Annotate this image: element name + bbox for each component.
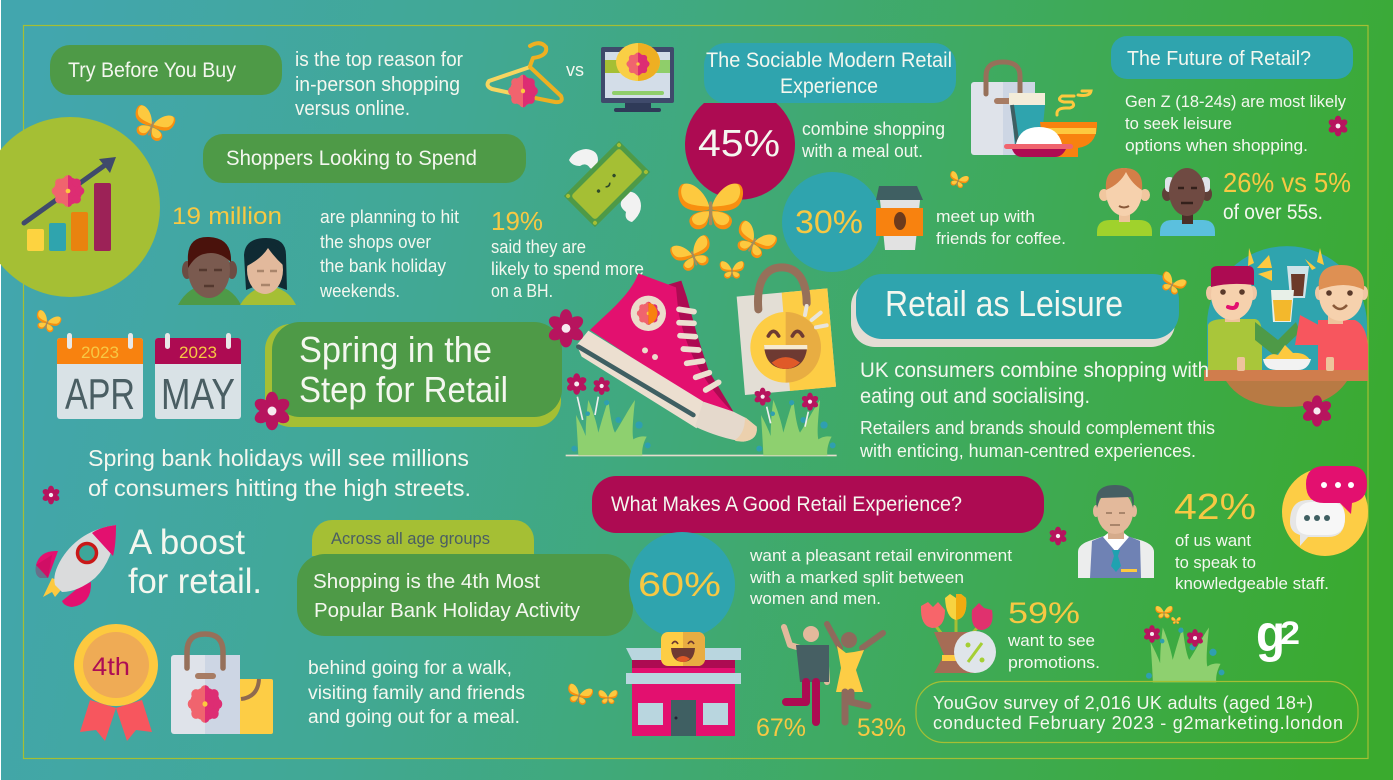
- stat: 53%: 53%: [857, 714, 906, 742]
- text: pleasant retail environment: with a marked split between: [749, 568, 964, 587]
- text: likely to spend more: [491, 237, 644, 301]
- flower: [41, 486, 61, 504]
- text: knowledgeable staff: to speak to: [1175, 553, 1256, 572]
- calendar: April: [57, 333, 143, 419]
- icon: rocket: [36, 525, 116, 607]
- left edge: [0, 0, 1, 780]
- text: combine shopping: with a meal out.: [801, 141, 923, 161]
- text: planning to hit the shops: [319, 207, 459, 301]
- heading: The Sociable Modern Retail Experience: [704, 43, 956, 103]
- calendar: April: APR: [65, 370, 135, 419]
- icon: tulips with discount tag: [921, 594, 996, 673]
- stat: 59%: 59%: [1008, 597, 1080, 630]
- source box: [916, 682, 1358, 742]
- text: spring bank holidays: of consumers hitting the high streets.: [88, 475, 471, 501]
- text: Gen Z: [1125, 92, 1346, 155]
- icon: young and older person: [1097, 168, 1215, 236]
- text: combine shopping: [801, 119, 945, 161]
- text: knowledgeable staff: [1175, 531, 1329, 593]
- text: pleasant retail environment: women and men.: [749, 589, 881, 608]
- heading: Shoppers Looking to Spend: [203, 134, 526, 183]
- stat: 19%: 19%: [491, 206, 543, 236]
- panel: 4th most popular activity: [297, 554, 633, 636]
- icon: 4th place medal: 4th: [92, 653, 130, 681]
- heading: Retail as Leisure: [851, 274, 1179, 347]
- text: planning to hit the shops: the shops over: [320, 232, 431, 252]
- icon: 4th place medal: [74, 624, 158, 741]
- text: A boost for retail: for retail.: [128, 562, 262, 601]
- heading: What Makes A Good Retail Experience?: [592, 476, 1044, 533]
- icon: chat bubbles: [1282, 466, 1368, 556]
- heading: The Sociable Modern Retail Experience: Experience: [780, 74, 878, 98]
- heading: The Future of Retail?: The Future of Retail?: [1127, 48, 1311, 70]
- text: want to see promotions: [1007, 631, 1100, 672]
- text: of over 55s: of over 55s.: [1223, 201, 1323, 224]
- icon: grass, flowers and butterflies: [1143, 606, 1225, 682]
- text: spring bank holidays: Spring bank holidays will see millions: [88, 445, 469, 471]
- panel: growth chart circle: [0, 117, 160, 297]
- text: UK consumers: [860, 359, 1209, 408]
- stat circle: 60%: 60%: [638, 566, 721, 604]
- text: want to see promotions: want to see: [1007, 631, 1095, 650]
- source box: YouGov survey of 2,016 UK adults (aged 18+): [933, 693, 1313, 713]
- calendar: May: 2023: [179, 343, 217, 362]
- flowers: [546, 309, 819, 427]
- stat circle: 30%: 30%: [795, 204, 863, 240]
- tab: Across all age groups: Across all age groups: [331, 529, 490, 548]
- text: planning to hit the shops: are planning to hit: [320, 207, 459, 227]
- icon: staff member: [1078, 485, 1154, 578]
- icon: flying banknote: [564, 141, 650, 227]
- stat: 42%: 42%: [1174, 486, 1256, 527]
- stat circle: 45%: 45%: [698, 123, 780, 165]
- text: want to see promotions: promotions.: [1008, 653, 1100, 672]
- text: behind going for a walk: behind going for a walk,: [308, 658, 512, 679]
- icon: friends toasting at a table: [1204, 246, 1368, 407]
- icon: two shoppers: [178, 237, 296, 305]
- label: vs: vs: [566, 60, 584, 80]
- butterfly: [947, 170, 970, 190]
- text: behind going for a walk: and going out for a meal.: [308, 707, 520, 728]
- heading: Try Before You Buy: [50, 45, 282, 95]
- icon: bag, drink and food: [971, 62, 1097, 157]
- text: meet up with friends: [936, 207, 1066, 248]
- heading: Try Before You Buy: Try Before You Buy: [68, 59, 236, 82]
- text: Gen Z: to seek leisure: [1125, 114, 1232, 133]
- text: A boost for retail: A boost: [129, 523, 245, 562]
- heading: What Makes A Good Retail Experience?: What Makes A Good Retail Experience?: [611, 493, 962, 516]
- flower: [252, 392, 292, 430]
- text: knowledgeable staff: knowledgeable staff.: [1175, 574, 1329, 593]
- icon: shopping bags: [171, 634, 273, 734]
- icon: clothes hanger: [488, 43, 562, 107]
- text: top reason: in-person shopping: [295, 74, 460, 96]
- butterflies: [565, 683, 618, 707]
- flower: [1327, 116, 1349, 136]
- text: spring bank holidays: [88, 445, 471, 501]
- stat circle: 30%: [782, 172, 882, 272]
- stat: 19 million: 19 million: [172, 203, 282, 230]
- text: top reason: [295, 49, 463, 120]
- stat: 26% vs 5%: 26% vs 5%: [1223, 167, 1351, 198]
- butterfly: [32, 309, 62, 335]
- text: retailers and brands: Retailers and brands should complement this: [860, 418, 1215, 438]
- text: likely to spend more: on a BH.: [491, 281, 553, 301]
- heading: The Future of Retail?: [1111, 36, 1353, 79]
- text: meet up with friends: friends for coffee.: [936, 229, 1066, 248]
- text: top reason: is the top reason for: [295, 49, 463, 71]
- calendar: May: [155, 333, 241, 419]
- grass right: [756, 400, 836, 455]
- calendar: May: MAY: [161, 370, 235, 419]
- heading: Shoppers Looking to Spend: Shoppers Looking to Spend: [226, 147, 477, 170]
- text: meet up with friends: meet up with: [936, 207, 1035, 226]
- heading: Retail as Leisure: Retail as Leisure: [885, 283, 1123, 324]
- calendar: April: 2023: [81, 343, 119, 362]
- text: UK consumers: eating out and socialising.: [860, 385, 1090, 408]
- logo: g2: g: [1256, 605, 1285, 663]
- text: UK consumers: UK consumers combine shopping with: [860, 359, 1209, 382]
- text: pleasant retail environment: want a pleasant retail environment: [749, 546, 1012, 565]
- heading: The Sociable Modern Retail Experience: The Sociable Modern Retail: [706, 48, 952, 72]
- text: Gen Z: Gen Z (18-24s) are most likely: [1125, 92, 1346, 111]
- text: retailers and brands: with enticing, human-centred experiences.: [859, 441, 1196, 461]
- stat circle: 60%: [629, 532, 735, 638]
- text: retailers and brands: [859, 418, 1215, 461]
- text: Gen Z: options when shopping.: [1125, 136, 1308, 155]
- title: Spring in the Step for Retail: Spring in the: [299, 329, 492, 370]
- text: top reason: versus online.: [295, 98, 410, 120]
- icon: man and woman jumping: [784, 624, 883, 722]
- text: pleasant retail environment: [749, 546, 1012, 608]
- sneaker: [577, 273, 757, 442]
- flower: [1048, 527, 1068, 545]
- panel: 4th most popular activity: Popular Bank Holiday Activity: [314, 599, 581, 622]
- panel: 4th most popular activity: Shopping is the 4th Most: [313, 570, 540, 593]
- logo: g2: 2: [1280, 615, 1300, 651]
- text: behind going for a walk: visiting family and friends: [308, 683, 525, 704]
- ground line: [566, 455, 837, 456]
- text: planning to hit the shops: weekends.: [319, 281, 400, 301]
- icon: shop front with smiley: [626, 632, 741, 736]
- grass left: [571, 400, 651, 455]
- text: planning to hit the shops: the bank holiday: [320, 256, 446, 276]
- icon: computer monitor: [601, 43, 674, 112]
- icon: coffee cup: [876, 186, 923, 250]
- tab: Across all age groups: [312, 520, 534, 556]
- source box: conducted February 2023 - g2marketing.london: [933, 713, 1343, 733]
- text: knowledgeable staff: of us want: [1175, 531, 1251, 550]
- title: Spring in the Step for Retail: Step for Retail: [299, 369, 508, 410]
- stat circle: 45%: [685, 103, 795, 200]
- central illustration: sneaker, bag and grass: [546, 184, 837, 456]
- text: combine shopping: combine shopping: [802, 119, 945, 139]
- stat: 67%: 67%: [756, 714, 806, 742]
- shopping bag with smiley: [737, 267, 836, 395]
- title: Spring in the Step for Retail: [265, 322, 562, 427]
- text: likely to spend more: said they are: [491, 237, 586, 257]
- flower: [1301, 395, 1333, 427]
- butterfly: [129, 104, 177, 145]
- text: behind going for a walk: [308, 658, 525, 728]
- text: A boost for retail: [128, 523, 262, 601]
- butterflies: [669, 184, 779, 279]
- text: likely to spend more: likely to spend more: [491, 259, 644, 279]
- butterfly: [1157, 271, 1188, 297]
